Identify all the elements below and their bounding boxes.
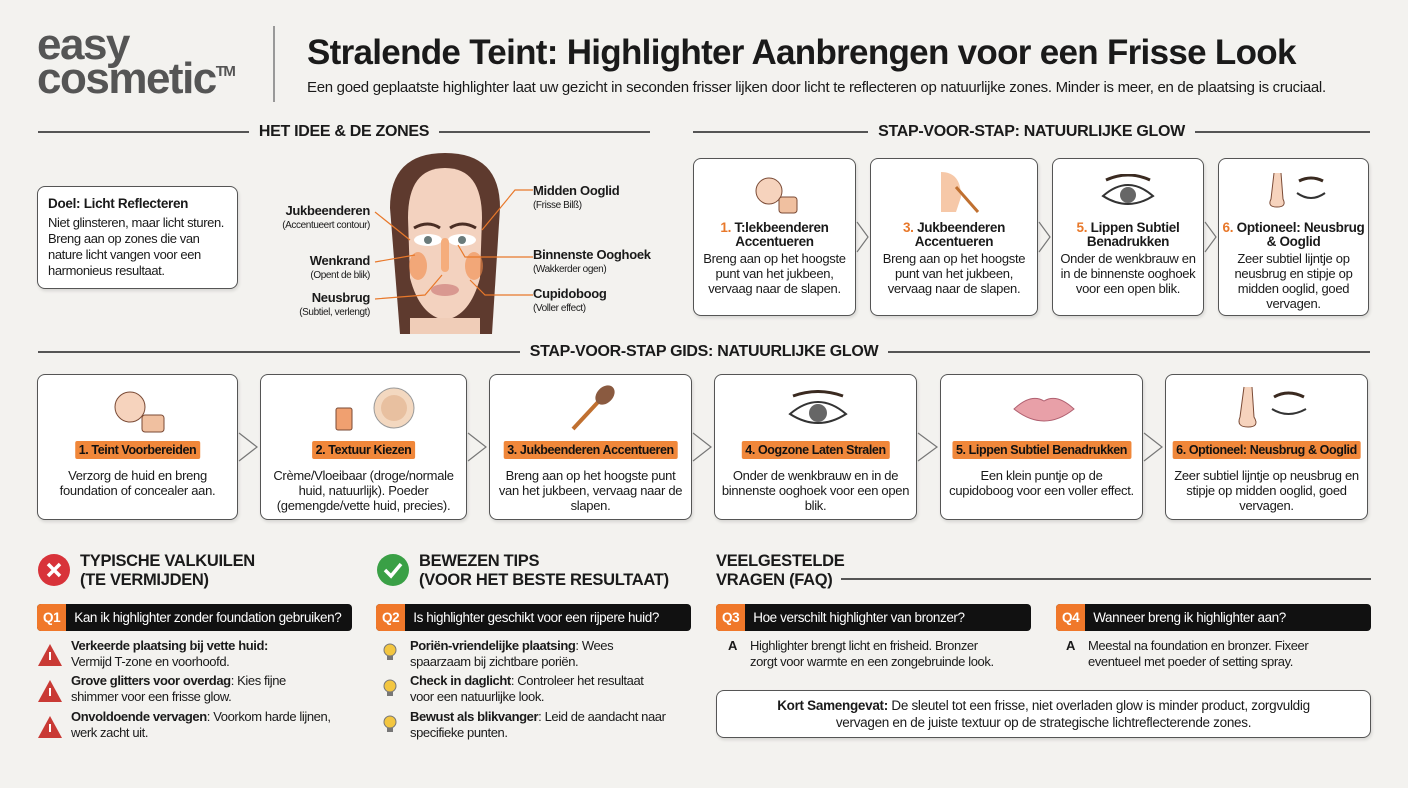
text: (Opent de blik) — [310, 270, 370, 281]
zone labels — [282, 203, 370, 231]
logo: easy — [37, 20, 129, 69]
panel: FAQ: Q3 — [722, 610, 739, 625]
text: 3. Jukbeenderen — [903, 220, 1005, 235]
doel box: Niet glinsteren, maar licht sturen. Breng aan op zones die van nature licht vangen voor een harmonieus resultaat. — [48, 215, 224, 278]
bottom step cards: Verzorg de huid en breng foundation of concealer aan. — [60, 468, 215, 498]
panel: FAQ: Highlighter brengt licht en frisheid. Bronzer — [750, 638, 978, 653]
text: 3. Jukbeenderen Accentueren — [507, 443, 674, 457]
bottom step cards: 1. Teint Voorbereiden — [79, 443, 196, 457]
panel: tips: specifieke punten. — [410, 725, 508, 740]
text: (Wakkerder ogen) — [533, 264, 606, 275]
text: Breng aan op het hoogste punt van het jukbeen, vervaag naar de slapen. — [883, 251, 1025, 296]
doel box: Doel: Licht Reflecteren — [48, 196, 188, 211]
panel: FAQ: Hoe verschilt highlighter van bronzer? — [753, 610, 965, 625]
logo: cosmeticTM — [37, 54, 234, 103]
panel: FAQ: Q4 — [1062, 610, 1079, 625]
text: (Subtiel, verlengt) — [299, 307, 370, 318]
panel: FAQ: A — [728, 638, 737, 653]
panel: FAQ — [716, 552, 1373, 741]
panel: tips: BEWEZEN TIPS — [419, 552, 539, 570]
zone labels: Jukbeenderen — [285, 203, 370, 218]
divider heading gids: STAP-VOOR-STAP GIDS: NATUURLIJKE GLOW — [530, 343, 878, 360]
text: & Ooglid — [1267, 234, 1320, 249]
panel: valkuilen: (TE VERMIJDEN) — [80, 571, 209, 589]
panel: FAQ: Meestal na foundation en bronzer. Fixeer — [1088, 638, 1308, 653]
panel: valkuilen: TYPISCHE VALKUILEN — [80, 552, 255, 570]
panel: tips: Q2 — [382, 610, 399, 625]
text: 6. Optioneel: Neusbrug & Ooglid — [1176, 443, 1357, 457]
text: (Frisse Bilß) — [533, 200, 582, 211]
text: 6. Optioneel: Neusbrug — [1223, 220, 1364, 235]
text: Accentueren — [915, 234, 993, 249]
section heading: stap: STAP-VOOR-STAP: NATUURLIJKE GLOW — [878, 123, 1185, 140]
top step cards: 1. T:lekbeenderen — [720, 220, 829, 235]
text: Neusbrug — [312, 290, 370, 305]
panel: valkuilen: Onvoldoende vervagen: Voorkom harde lijnen, — [71, 709, 331, 724]
panel: tips: Is highlighter geschikt voor een rijpere huid? — [413, 610, 659, 625]
panel: tips: Poriën-vriendelijke plaatsing: Wees — [410, 638, 613, 653]
panel: tips: Bewust als blikvanger: Leid de aandacht naar — [410, 709, 666, 724]
panel: FAQ: zorgt voor warmte en een zongebruinde look. — [750, 654, 994, 669]
panel: tips — [376, 552, 691, 740]
panel: FAQ: A — [1066, 638, 1075, 653]
title: Stralende Teint: Highlighter Aanbrengen voor een Frisse Look — [307, 33, 1296, 72]
panel: valkuilen: Grove glitters voor overdag: Kies fijne — [71, 673, 286, 688]
summary box — [716, 690, 1371, 738]
top step cards — [693, 158, 856, 316]
panel: FAQ: VEELGESTELDE — [716, 552, 844, 570]
top step cards: Accentueren — [735, 234, 814, 249]
bottom step cards — [37, 374, 238, 520]
summary box: vervagen en de juiste textuur op de strategische lichtreflecterende zones. — [836, 715, 1251, 730]
logo — [37, 20, 235, 103]
panel: valkuilen — [37, 552, 352, 740]
text: 5. Lippen Subtiel — [1077, 220, 1179, 235]
panel: valkuilen: Kan ik highlighter zonder foundation gebruiken? — [74, 610, 341, 625]
text: Binnenste Ooghoek — [533, 247, 651, 262]
text: Midden Ooglid — [533, 183, 619, 198]
zone labels: (Accentueert contour) — [282, 220, 370, 231]
panel: FAQ: eventueel met poeder of setting spray. — [1088, 654, 1293, 669]
panel: FAQ: VRAGEN (FAQ) — [716, 571, 832, 589]
text: (Voller effect) — [533, 303, 586, 314]
section heading: idee: HET IDEE & DE ZONES — [259, 123, 429, 140]
text: Crème/Vloeibaar (droge/normale huid, natuurlijk). Poeder (gemengde/vette huid, precies). — [273, 468, 454, 513]
top step cards: Breng aan op het hoogste punt van het jukbeen, vervaag naar de slapen. — [703, 251, 846, 296]
summary box: Kort Samengevat: De sleutel tot een frisse, niet overladen glow is minder product, zorgvuldig — [777, 698, 1310, 713]
panel: tips: (VOOR HET BESTE RESULTAAT) — [419, 571, 669, 589]
text: Zeer subtiel lijntje op neusbrug en stipje op midden ooglid, goed vervagen. — [1234, 251, 1352, 311]
text: Wenkrand — [310, 253, 370, 268]
text: 5. Lippen Subtiel Benadrukken — [956, 443, 1127, 457]
panel: tips: Check in daglicht: Controleer het resultaat — [410, 673, 644, 688]
text: Cupidoboog — [533, 286, 607, 301]
text: 2. Textuur Kiezen — [316, 443, 411, 457]
text: Zeer subtiel lijntje op neusbrug en stipje op midden ooglid, goed vervagen. — [1174, 468, 1359, 513]
text: 4. Oogzone Laten Stralen — [745, 443, 886, 457]
text: Benadrukken — [1087, 234, 1169, 249]
panel: valkuilen: Vermijd T-zone en voorhoofd. — [71, 654, 229, 669]
panel: tips: spaarzaam bij zichtbare poriën. — [410, 654, 578, 669]
face illustration — [390, 153, 500, 334]
panel: FAQ: Wanneer breng ik highlighter aan? — [1093, 610, 1286, 625]
panel: valkuilen: shimmer voor een frisse glow. — [71, 689, 231, 704]
panel: valkuilen: Verkeerde plaatsing bij vette huid: — [71, 638, 268, 653]
panel: tips: voor een natuurlijke look. — [410, 689, 544, 704]
panel: valkuilen: Q1 — [43, 610, 60, 625]
doel box — [37, 186, 238, 289]
text: Een klein puntje op de cupidoboog voor een voller effect. — [949, 468, 1134, 498]
text: Onder de wenkbrauw en in de binnenste ooghoek voor een open blik. — [722, 468, 909, 513]
text: Onder de wenkbrauw en in de binnenste ooghoek voor een open blik. — [1060, 251, 1196, 296]
panel: valkuilen: werk zacht uit. — [71, 725, 148, 740]
subtitle: Een goed geplaatste highlighter laat uw gezicht in seconden frisser lijken door licht te reflecteren op natuurlijke zones. Minder is meer, en de plaatsing is cruciaal. — [307, 79, 1326, 96]
text: Breng aan op het hoogste punt van het jukbeen, vervaag naar de slapen. — [499, 468, 682, 513]
